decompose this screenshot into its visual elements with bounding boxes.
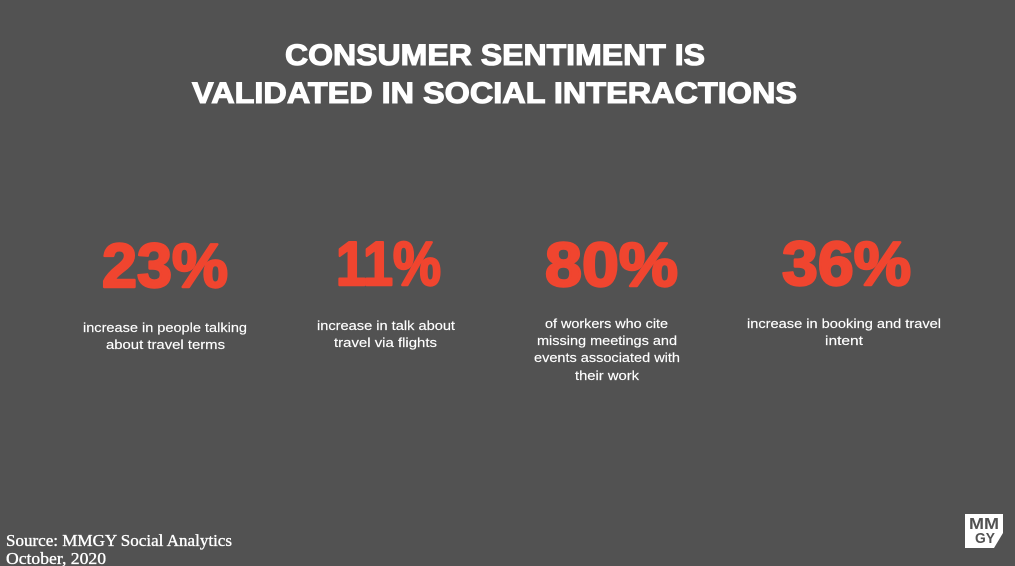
description: 23%: increase in people talking [83,320,247,335]
description: 11%: increase in talk about [317,318,455,333]
stat: 36% [747,230,941,348]
logo: MMGY: MM [969,516,999,533]
description: 23% [83,320,247,352]
title: VALIDATED IN SOCIAL INTERACTIONS [192,77,797,110]
number: 23%: 23% [102,232,228,301]
description: 36%: increase in booking and travel [747,316,941,331]
logo: MMGY [965,514,1003,548]
description: 80%: events associated with [534,350,680,365]
title [192,39,797,110]
number: 80%: 80% [545,231,678,300]
source note: Source: MMGY Social Analytics [6,531,232,550]
source note [6,531,232,566]
stat: 23% [83,232,247,352]
description: 80%: their work [575,368,640,383]
logo: MMGY: GY [975,531,995,547]
title: CONSUMER SENTIMENT IS [285,39,705,72]
stat: 11% [317,230,455,350]
description: 11% [317,318,455,350]
description: 11%: travel via flights [334,335,438,350]
description: 80%: of workers who cite [545,316,668,331]
description: 80%: missing meetings and [537,333,677,348]
number: 11%: 11% [336,230,441,299]
stat: 80% [534,231,680,383]
description: 23%: about travel terms [106,337,226,352]
description: 80% [534,316,680,383]
description: 36% [747,316,941,348]
description: 36%: intent [825,333,863,348]
number: 36%: 36% [782,230,911,299]
